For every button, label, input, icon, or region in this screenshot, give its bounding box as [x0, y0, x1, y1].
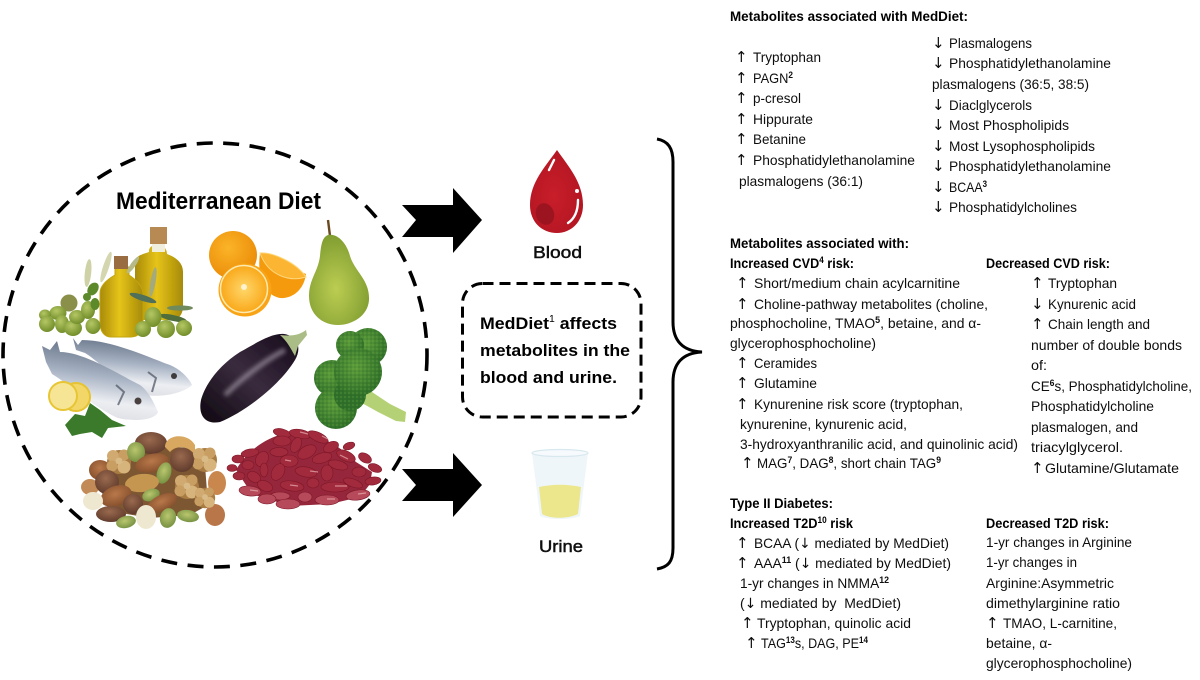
list: decreased CVD risk metabolites: s, Phosphatidylcholine, — [1054, 378, 1192, 394]
list: increased metabolites: p-cresol — [753, 90, 801, 106]
list: increased metabolites: Tryptophan — [753, 49, 821, 65]
icon: oranges — [209, 231, 306, 316]
list: decreased CVD risk metabolites: ↑ — [1031, 315, 1044, 333]
list: increased metabolites: ↑ — [735, 48, 748, 66]
list: increased CVD risk metabolites: ↑ — [736, 295, 749, 313]
list: increased CVD risk metabolites: 5 — [875, 315, 880, 325]
list: increased CVD risk metabolites: , short chain TAG — [833, 455, 936, 471]
list: increased metabolites: 2 — [788, 70, 793, 80]
list: increased T2D risk metabolites: 11 — [782, 555, 791, 565]
heading: increased T2D risk: 10 — [818, 515, 827, 525]
list: increased CVD risk metabolites — [730, 274, 1018, 472]
icon: urine cup — [532, 450, 588, 519]
callout text: blood and urine. — [480, 368, 617, 387]
heading: increased CVD risk: risk: — [824, 255, 854, 271]
icon: pear — [309, 220, 369, 325]
list: decreased T2D risk metabolites: Arginine:Asymmetric — [986, 575, 1114, 591]
callout text: 1 — [549, 314, 555, 325]
heading: Type II Diabetes: Type II Diabetes: — [730, 495, 833, 511]
icon: broccoli — [314, 328, 406, 429]
list: decreased CVD risk metabolites — [1031, 274, 1192, 477]
list: decreased metabolites: plasmalogens (36:5, 38:5) — [932, 76, 1089, 92]
list: decreased metabolites: ↓ — [932, 137, 945, 155]
list: increased CVD risk metabolites: ↑ — [736, 374, 749, 392]
arrow: diet to blood — [402, 188, 482, 253]
list: decreased metabolites: ↓ — [932, 178, 945, 196]
list: increased CVD risk metabolites: MAG — [757, 455, 789, 471]
list: increased CVD risk metabolites: Glutamine — [754, 375, 817, 391]
list: increased T2D risk metabolites: AAA — [754, 555, 782, 571]
list: decreased T2D risk metabolites: betaine, α- — [986, 635, 1052, 651]
list: increased T2D risk metabolites: s, DAG, PE — [795, 635, 859, 651]
list: increased CVD risk metabolites: ↑ — [736, 274, 749, 292]
dashed circle outline — [3, 143, 427, 567]
list: decreased metabolites: Phosphatidylcholines — [949, 199, 1077, 215]
list: increased CVD risk metabolites: Kynurenine risk score (tryptophan, — [754, 396, 963, 412]
list: decreased metabolites: 3 — [983, 179, 987, 189]
list: decreased CVD risk metabolites: Phosphatidylcholine — [1031, 398, 1154, 414]
list: increased CVD risk metabolites: ↑ — [741, 454, 754, 472]
list: increased T2D risk metabolites: BCAA (↓ mediated by MedDiet) — [754, 535, 949, 552]
panel: Type II Diabetes — [730, 495, 1132, 671]
arrow: diet to urine — [402, 453, 482, 517]
list: increased T2D risk metabolites: TAG — [761, 635, 789, 651]
list: increased CVD risk metabolites: 9 — [936, 455, 941, 465]
list: decreased metabolites — [932, 34, 1111, 216]
callout text — [480, 314, 630, 387]
list: increased CVD risk metabolites: , DAG — [792, 455, 829, 471]
label: Blood: Blood — [533, 243, 582, 262]
list: increased metabolites: ↑ — [735, 151, 748, 169]
list: increased metabolites: ↑ — [735, 130, 748, 148]
list: decreased CVD risk metabolites: ↑ — [1031, 274, 1044, 292]
icon: kidney beans — [227, 427, 383, 509]
list: increased T2D risk metabolites — [736, 534, 951, 652]
list: decreased metabolites: Phosphatidylethanolamine — [949, 158, 1111, 174]
icon: olive oil bottles and olives — [39, 227, 193, 338]
list: increased metabolites: ↑ — [735, 110, 748, 128]
heading: increased T2D risk: Increased T2D — [730, 515, 826, 531]
panel: Mediterranean Diet circle — [3, 143, 427, 567]
list: decreased T2D risk metabolites: 1-yr changes in — [986, 554, 1077, 570]
list: increased T2D risk metabolites: ↑ — [736, 554, 749, 572]
list: decreased T2D risk metabolites: 1-yr changes in Arginine — [986, 534, 1132, 550]
list: decreased CVD risk metabolites: 6 — [1050, 378, 1054, 388]
list: increased metabolites: PAGN — [753, 70, 792, 86]
list: increased T2D risk metabolites: ↑ — [736, 534, 749, 552]
list: decreased CVD risk metabolites: Chain length and — [1048, 316, 1150, 332]
list: increased T2D risk metabolites: 1-yr changes in NMMA — [740, 575, 882, 591]
list: increased T2D risk metabolites: 12 — [879, 575, 889, 585]
list: increased CVD risk metabolites: 8 — [829, 455, 833, 465]
list: decreased CVD risk metabolites: CE — [1031, 378, 1050, 394]
list: increased T2D risk metabolites: ↑ — [745, 634, 758, 652]
list: increased CVD risk metabolites: 3-hydroxyanthranilic acid, and quinolinic acid) — [740, 436, 1018, 452]
list: decreased metabolites: ↓ — [932, 54, 945, 72]
list: decreased metabolites: ↓ — [932, 96, 945, 114]
brace: grouping blood and urine to metabolite lists — [657, 139, 702, 569]
list: decreased CVD risk metabolites: number of double bonds — [1031, 337, 1182, 353]
list: increased CVD risk metabolites: Short/medium chain acylcarnitine — [754, 275, 960, 291]
list: increased CVD risk metabolites: , betaine, and α- — [880, 315, 981, 331]
label: Urine: Urine — [539, 537, 583, 556]
list: decreased T2D risk metabolites: ↑ — [986, 614, 999, 632]
callout: MedDiet affects metabolites — [462, 284, 641, 417]
list: increased metabolites: Betanine — [753, 131, 806, 147]
list: increased T2D risk metabolites: ( — [791, 555, 800, 571]
callout text: metabolites in the — [480, 341, 630, 360]
list: decreased CVD risk metabolites: ↓ — [1031, 295, 1044, 313]
list: decreased T2D risk metabolites: dimethylarginine ratio — [986, 595, 1120, 611]
list: increased CVD risk metabolites: glycerophosphocholine) — [730, 335, 876, 351]
list: increased CVD risk metabolites: 7 — [787, 455, 792, 465]
list: increased T2D risk metabolites: Tryptophan, quinolic acid — [757, 615, 911, 631]
callout text: MedDiet — [480, 314, 546, 333]
list: decreased CVD risk metabolites: Kynurenic acid — [1048, 296, 1136, 312]
list: decreased T2D risk metabolites — [986, 534, 1132, 671]
list: increased T2D risk metabolites: ↓ mediated by MedDiet) — [800, 555, 952, 572]
heading: decreased CVD risk: Decreased CVD risk: — [986, 255, 1110, 271]
list: decreased metabolites: ↓ — [932, 198, 945, 216]
icon: eggplant — [200, 330, 307, 423]
list: decreased CVD risk metabolites: Glutamine/Glutamate — [1045, 460, 1179, 476]
list: decreased metabolites: ↓ — [932, 157, 945, 175]
list: decreased metabolites: Phosphatidylethanolamine — [949, 55, 1111, 71]
panel: metabolites associated with MedDiet — [730, 8, 1111, 216]
list: increased CVD risk metabolites: kynurenine, kynurenic acid, — [740, 416, 907, 432]
list: decreased metabolites: ↓ — [932, 34, 945, 52]
icon: fish with lemon and parsley — [42, 338, 192, 438]
list: increased T2D risk metabolites: 13 — [786, 635, 795, 645]
list: decreased CVD risk metabolites: ↑ — [1031, 459, 1044, 477]
list: increased metabolites: ↑ — [735, 89, 748, 107]
list: increased CVD risk metabolites: ↑ — [736, 354, 749, 372]
list: decreased T2D risk metabolites: glycerophosphocholine) — [986, 655, 1132, 671]
icon: mixed nuts — [81, 432, 226, 530]
list: increased metabolites: plasmalogens (36:1) — [739, 173, 863, 189]
callout text: affects — [555, 314, 617, 333]
heading: increased CVD risk: Increased CVD — [730, 255, 829, 271]
circle heading: Mediterranean Diet: Mediterranean Diet — [116, 188, 321, 215]
list: decreased CVD risk metabolites: of: — [1031, 357, 1047, 373]
list: increased CVD risk metabolites: Choline-pathway metabolites (choline, — [754, 296, 988, 312]
heading: metabolites associated with: Metabolites associated with: — [730, 235, 909, 251]
list: decreased metabolites: Most Lysophospholipids — [949, 138, 1095, 154]
list: increased CVD risk metabolites: ↑ — [736, 395, 749, 413]
list: increased CVD risk metabolites: Ceramides — [754, 355, 817, 371]
list: decreased metabolites: ↓ — [932, 116, 945, 134]
list: decreased metabolites: BCAA — [949, 179, 987, 195]
list: increased metabolites: Hippurate — [753, 111, 813, 127]
heading: metabolites with MedDiet: Metabolites associated with MedDiet: — [730, 8, 968, 24]
icon: blood drop — [530, 150, 583, 233]
list: increased CVD risk metabolites: phosphocholine, TMAO — [730, 315, 876, 331]
list: increased metabolites — [735, 48, 915, 189]
list: increased T2D risk metabolites: (↓ mediated by MedDiet) — [740, 595, 901, 612]
heading: increased CVD risk: 4 — [819, 255, 824, 265]
list: decreased T2D risk metabolites: TMAO, L-carnitine, — [1003, 615, 1117, 631]
heading: increased T2D risk: risk — [827, 515, 853, 531]
panel: metabolites associated with CVD risk — [730, 235, 1192, 477]
list: decreased metabolites: Diaclglycerols — [949, 97, 1032, 113]
list: decreased CVD risk metabolites: triacylglycerol. — [1031, 439, 1123, 455]
list: decreased CVD risk metabolites: Tryptophan — [1048, 275, 1117, 291]
list: decreased metabolites: Most Phospholipids — [949, 117, 1069, 133]
list: increased T2D risk metabolites: 14 — [859, 635, 868, 645]
heading: decreased T2D risk: Decreased T2D risk: — [986, 515, 1109, 531]
list: increased metabolites: Phosphatidylethanolamine — [753, 152, 915, 168]
list: decreased CVD risk metabolites: plasmalogen, and — [1031, 419, 1138, 435]
list: increased metabolites: ↑ — [735, 69, 748, 87]
list: increased T2D risk metabolites: ↑ — [741, 614, 754, 632]
list: decreased metabolites: Plasmalogens — [949, 35, 1032, 51]
